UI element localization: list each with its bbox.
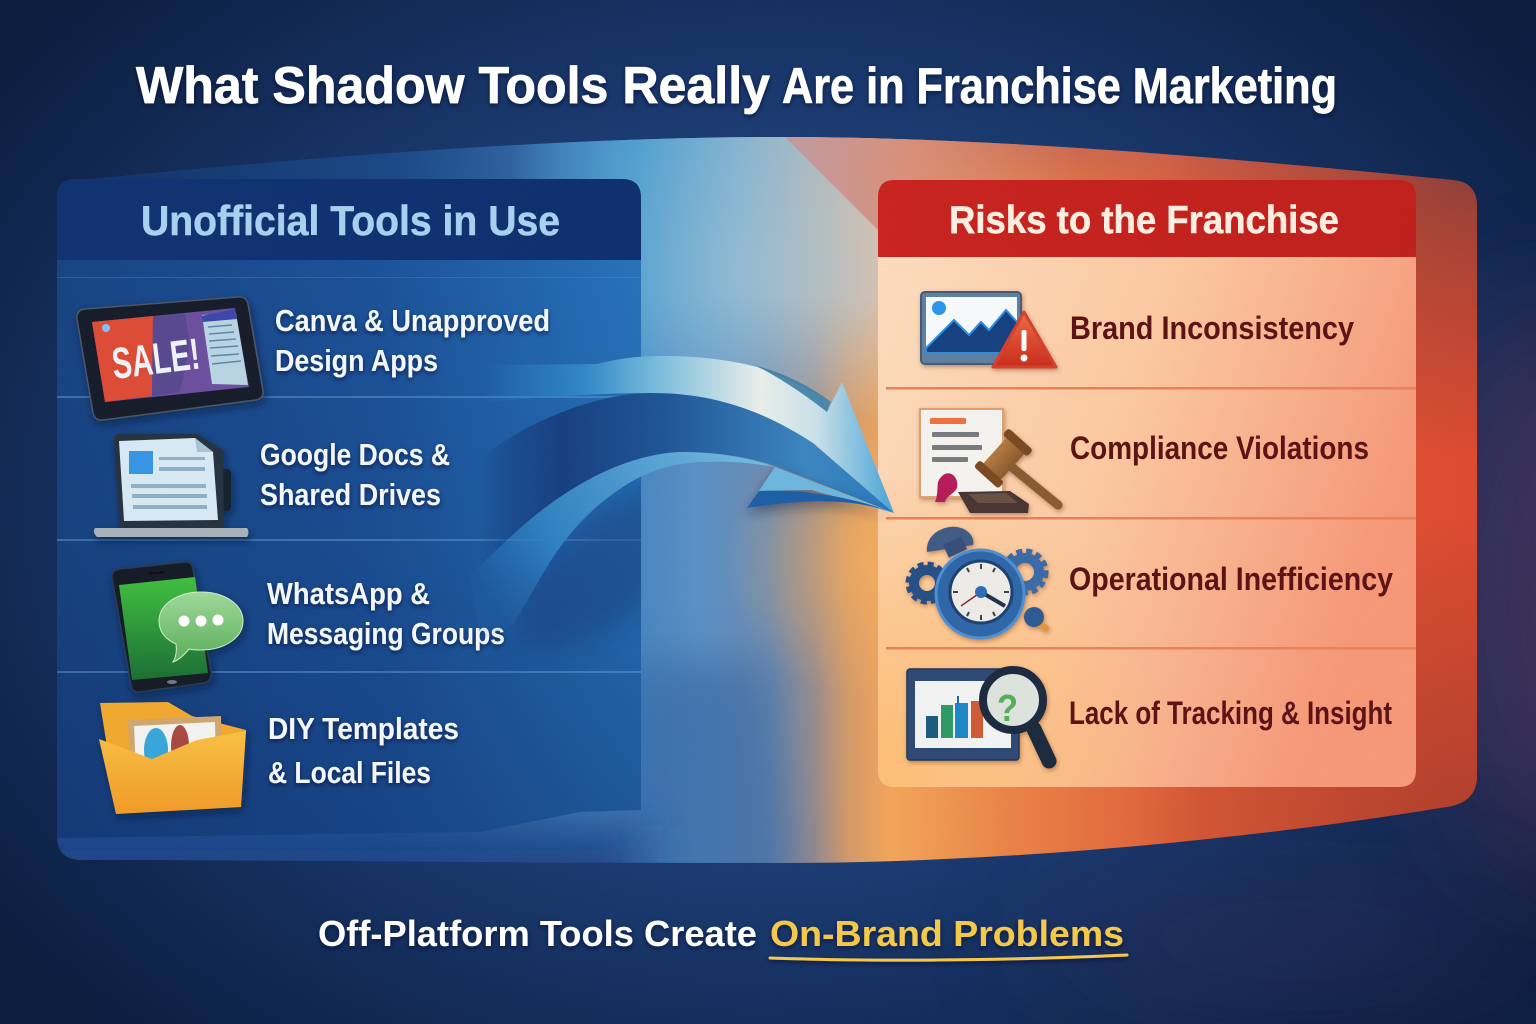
icon: phone with message bubble <box>112 562 243 692</box>
tagline: On-Brand Problems <box>770 913 1124 954</box>
panel: risks to the franchise <box>878 180 1416 787</box>
label: google docs and shared drives: Google Docs & <box>260 437 450 472</box>
title: What Shadow Tools Really <box>136 57 770 115</box>
icon: open folder with files <box>99 702 246 814</box>
label: canva and unapproved design apps <box>275 303 550 378</box>
panel: unofficial tools <box>57 179 641 838</box>
header bar: risks <box>878 180 1416 257</box>
label: operational inefficiency: Operational Inefficiency <box>1069 561 1393 597</box>
label: compliance violations: Compliance Violations <box>1070 430 1369 466</box>
label: whatsapp and messaging groups: WhatsApp & <box>267 576 430 611</box>
label: google docs and shared drives: Shared Drives <box>260 477 441 512</box>
title: Are in Franchise Marketing <box>782 58 1337 114</box>
central gradient band <box>57 137 1477 863</box>
icon: clock with gears <box>908 527 1046 639</box>
label: whatsapp and messaging groups <box>267 576 505 651</box>
heading: unofficial tools in use: Unofficial Tools in Use <box>141 197 560 244</box>
icon: tablet with sale graphic: SALE! <box>109 330 203 389</box>
icon: chart monitor with magnifier <box>907 669 1049 761</box>
title <box>136 57 1337 115</box>
icon: tablet with sale graphic <box>77 297 263 420</box>
header bar: unofficial tools <box>57 179 641 260</box>
label: brand inconsistency: Brand Inconsistency <box>1070 310 1354 346</box>
label: diy templates and local files: & Local Files <box>268 755 431 790</box>
label: whatsapp and messaging groups: Messaging Groups <box>267 616 505 651</box>
arrow: curved arrow from tools to risks <box>470 356 894 650</box>
label: canva and unapproved design apps: Design Apps <box>275 343 438 378</box>
icon: image with warning triangle <box>921 292 1056 367</box>
icon: chart monitor with magnifier: ? <box>997 688 1018 730</box>
tagline: Off-Platform Tools Create <box>318 913 757 954</box>
label: google docs and shared drives <box>260 437 450 512</box>
label: diy templates and local files: DIY Templates <box>268 711 459 746</box>
icon: laptop with document <box>94 434 248 537</box>
tagline <box>318 913 1127 960</box>
label: lack of tracking and insight: Lack of Tracking & Insight <box>1069 695 1392 731</box>
label: diy templates and local files <box>268 711 459 790</box>
label: canva and unapproved design apps: Canva & Unapproved <box>275 303 550 338</box>
icon: document with gavel <box>920 409 1058 513</box>
heading: risks to the franchise: Risks to the Franchise <box>949 199 1339 242</box>
